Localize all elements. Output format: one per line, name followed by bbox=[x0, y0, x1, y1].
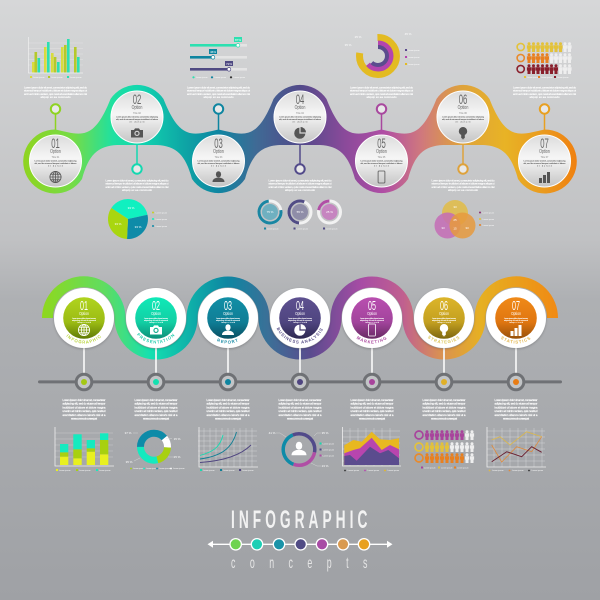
text block under node 06: adipiscing elit, sed do eiusmod tempor bbox=[422, 402, 466, 406]
text block above option 05 bbox=[350, 86, 413, 99]
text block below option 02: Lorem ipsum dolor sit amet, consectetur adipiscing elit, sed do bbox=[106, 178, 169, 182]
pie chart: Lorem ipsum bbox=[156, 219, 167, 221]
badge 04 business analysis: Option bbox=[295, 310, 305, 316]
badge 07 statistics bbox=[485, 288, 547, 350]
text block under node 05: ex ea commodo consequat bbox=[359, 416, 385, 420]
three ring gauges: Lorem ipsum bbox=[326, 228, 338, 230]
badge 03 report: Lorem ipsum dolor sit amet consec bbox=[216, 317, 240, 320]
top bar chart: Lorem ipsum bbox=[33, 77, 45, 79]
option 02 circle: Title 02 bbox=[133, 111, 141, 115]
text block under node 02: adipiscing elit, sed do eiusmod tempor bbox=[134, 402, 178, 406]
stacked bar chart bbox=[55, 427, 114, 472]
pictogram chart top: Lorem ipsum bbox=[527, 77, 539, 79]
progress bars chart bbox=[190, 37, 247, 79]
venn diagram: 15 bbox=[453, 226, 457, 230]
text block under node 07: incididunt ut labore et dolore magna bbox=[494, 405, 538, 409]
donut chart: Lorem ipsum bbox=[173, 468, 185, 470]
text block under node 01: exercitation ullamco laboris nisi ut a bbox=[62, 413, 106, 417]
text block under node 03: ex ea commodo consequat bbox=[215, 416, 241, 420]
line chart with curves: Lorem ipsum bbox=[223, 470, 235, 472]
option 07 circle: et dolore bbox=[537, 164, 553, 167]
badge 02 presentation bbox=[125, 288, 187, 350]
donut chart: Lorem ipsum bbox=[146, 468, 158, 470]
pie chart: 33 % bbox=[135, 225, 142, 229]
option 05 circle: Lorem ipsum dolor sit amet, consectetur adipiscing bbox=[360, 160, 403, 162]
text block below option 02: eiusmod tempor incididunt ut labore et dolore magna aliqua ut bbox=[106, 182, 169, 186]
option 04 circle: Option bbox=[295, 104, 306, 110]
radial bar chart: Lorem ipsum bbox=[408, 64, 420, 66]
text block under node 02: ex ea commodo consequat bbox=[143, 416, 169, 420]
pictogram chart bottom: Lorem ipsum bbox=[441, 467, 453, 469]
badge 03 report: adipiscing elit sed do eiusmod bbox=[216, 319, 240, 322]
badge 03 report: Option bbox=[223, 310, 233, 316]
option 02 circle: 02 bbox=[133, 93, 141, 108]
radial bar chart: Lorem ipsum bbox=[408, 50, 420, 52]
multi line chart: Lorem ipsum bbox=[512, 470, 524, 472]
option 03 circle: et dolore bbox=[211, 164, 227, 167]
badge 04 business analysis: Lorem ipsum dolor sit amet consec bbox=[288, 317, 312, 320]
text block under node 01: incididunt ut labore et dolore magna bbox=[62, 405, 106, 409]
person radial chart: 41 % bbox=[269, 431, 276, 435]
area chart: Lorem ipsum bbox=[368, 470, 379, 472]
badge 06 strategies: STRATEGIES bbox=[428, 336, 460, 344]
venn diagram bbox=[434, 200, 494, 238]
person radial chart: 35 % bbox=[322, 431, 329, 435]
option 04 circle: elit, sed do eiusmod tempor incididunt ut labore bbox=[279, 118, 322, 121]
text block below option 02 bbox=[106, 178, 169, 192]
pictogram chart bottom bbox=[415, 430, 474, 469]
progress bars chart: 46% bbox=[210, 50, 216, 54]
option 02 circle bbox=[111, 91, 163, 143]
text block under node 01: Lorem ipsum dolor sit amet, consectetur bbox=[62, 398, 106, 402]
text block under node 05: adipiscing elit, sed do eiusmod tempor bbox=[350, 402, 394, 406]
text block above option 07: enim ad minim veniam, quis nostrud exercitation ullamco nisi bbox=[513, 92, 576, 96]
option 05 circle: Title 05 bbox=[378, 155, 386, 159]
top bar chart: Lorem ipsum bbox=[70, 77, 82, 79]
badge 03 report: tempor incid bbox=[221, 321, 235, 324]
timeline node 01 bbox=[76, 374, 92, 390]
donut chart bbox=[125, 431, 185, 470]
text block below option 06 bbox=[432, 178, 495, 192]
option 07 circle: Option bbox=[539, 148, 550, 154]
option 04 circle: 04 bbox=[296, 93, 304, 108]
option 01 circle bbox=[30, 135, 82, 187]
text block below option 06: Lorem ipsum dolor sit amet, consectetur adipiscing elit, sed do bbox=[432, 178, 495, 182]
pictogram chart top: Lorem ipsum bbox=[541, 77, 553, 79]
pictogram chart top bbox=[517, 42, 572, 79]
badge 02 presentation: PRESENTATION bbox=[137, 332, 174, 344]
option 04 circle: Title 04 bbox=[296, 111, 304, 115]
text block under node 01: adipiscing elit, sed do eiusmod tempor bbox=[62, 402, 106, 406]
badge 02 presentation: Option bbox=[151, 310, 161, 316]
text block below option 04 bbox=[268, 178, 332, 192]
progress bars chart: Lorem ipsum bbox=[234, 77, 245, 79]
option 07 circle bbox=[518, 135, 570, 187]
option 05 circle: Option bbox=[376, 148, 387, 154]
area chart bbox=[342, 427, 401, 472]
text block under node 07: exercitation ullamco laboris nisi ut a bbox=[494, 413, 538, 417]
venn diagram: 25 bbox=[453, 218, 457, 222]
badge 01 infographic: 01 bbox=[80, 300, 88, 314]
option 04 circle: Lorem ipsum dolor sit amet, consectetur adipiscing bbox=[279, 116, 322, 118]
text block under node 03 bbox=[206, 398, 250, 420]
serpentine ribbon bbox=[48, 282, 552, 354]
badge 07 statistics: STATISTICS bbox=[500, 336, 530, 344]
option 07 circle: 07 bbox=[540, 137, 549, 152]
option 03 circle: Lorem ipsum dolor sit amet, consectetur adipiscing bbox=[198, 160, 240, 162]
progress bars chart: Lorem ipsum bbox=[214, 77, 226, 79]
text block under node 03: incididunt ut labore et dolore magna bbox=[206, 405, 250, 409]
pie chart: 33 % bbox=[128, 206, 135, 210]
timeline node 05 bbox=[364, 374, 380, 390]
text block under node 02: incididunt ut labore et dolore magna bbox=[134, 405, 178, 409]
pictogram chart bottom: Lorem ipsum bbox=[424, 467, 436, 469]
three ring gauges: 75 % bbox=[267, 210, 274, 214]
option 01 circle: Title 01 bbox=[52, 155, 60, 159]
text block above option 05: Lorem ipsum dolor sit amet, consectetur adipiscing elit, sed do bbox=[350, 86, 413, 90]
venn diagram: 33 bbox=[441, 226, 445, 230]
timeline node 06 bbox=[436, 374, 452, 390]
text block under node 04: ex ea commodo consequat bbox=[287, 416, 313, 420]
badge 06 strategies: Lorem ipsum dolor sit amet consec bbox=[432, 317, 456, 320]
donut chart: Lorem ipsum bbox=[133, 468, 145, 470]
badge 01 infographic: Option bbox=[79, 310, 89, 316]
three ring gauges: Lorem ipsum bbox=[267, 228, 279, 230]
line chart with curves: Lorem ipsum bbox=[242, 470, 254, 472]
text block under node 07: ut enim ad minim veniam, quis nostrud bbox=[494, 409, 538, 413]
badge 05 marketing: Option bbox=[367, 310, 377, 316]
progress bars chart: 87% bbox=[235, 38, 241, 42]
timeline bar bbox=[38, 380, 562, 383]
option 06 circle: Title 06 bbox=[459, 111, 467, 115]
badge 03 report bbox=[197, 288, 259, 350]
text block above option 07 bbox=[513, 86, 576, 99]
badge 01 infographic: tempor incid bbox=[77, 321, 91, 324]
multi line chart bbox=[487, 427, 546, 472]
venn diagram: 33 bbox=[465, 226, 469, 230]
timeline node 07 bbox=[508, 374, 524, 390]
text block above option 07: eiusmod tempor incididunt ut labore et dolore magna aliqua ut bbox=[513, 89, 576, 93]
option 03 circle: Option bbox=[213, 148, 224, 154]
three ring gauges: Lorem ipsum bbox=[296, 228, 308, 230]
line chart with curves: Lorem ipsum bbox=[203, 470, 215, 472]
text block below option 06: enim ad minim veniam, quis nostrud exercitation ullamco nisi bbox=[432, 185, 495, 189]
option 06 circle: 06 bbox=[459, 93, 467, 108]
option 02 circle: elit, sed do eiusmod tempor incididunt ut labore bbox=[116, 118, 159, 121]
badge 05 marketing: Lorem ipsum dolor sit amet consec bbox=[360, 317, 384, 320]
donut chart: Lorem ipsum bbox=[159, 468, 171, 470]
text block under node 03: exercitation ullamco laboris nisi ut a bbox=[206, 413, 250, 417]
option 03 circle bbox=[192, 135, 244, 187]
pictogram chart top: Lorem ipsum bbox=[557, 77, 569, 79]
multi line chart: Lorem ipsum bbox=[532, 470, 543, 472]
text block below option 02: aliquip ex ea commodo bbox=[122, 188, 152, 192]
text block under node 05: exercitation ullamco laboris nisi ut a bbox=[350, 413, 394, 417]
wave ribbon bbox=[23, 85, 577, 193]
stacked bar chart: Lorem ipsum bbox=[59, 470, 71, 472]
top bar chart bbox=[28, 37, 83, 79]
text block under node 06: exercitation ullamco laboris nisi ut a bbox=[422, 413, 466, 417]
text block under node 06 bbox=[422, 398, 466, 420]
text block under node 03: adipiscing elit, sed do eiusmod tempor bbox=[206, 402, 250, 406]
progress bars chart: 72% bbox=[226, 62, 232, 66]
person radial chart bbox=[269, 431, 334, 468]
progress bars chart: Lorem ipsum bbox=[196, 77, 208, 79]
text block above option 07: Lorem ipsum dolor sit amet, consectetur adipiscing elit, sed do bbox=[513, 86, 576, 90]
text block under node 04: ut enim ad minim veniam, quis nostrud bbox=[278, 409, 322, 413]
text block above option 05: enim ad minim veniam, quis nostrud exercitation ullamco nisi bbox=[350, 92, 413, 96]
donut chart: 15 % bbox=[174, 455, 181, 459]
badge 01 infographic bbox=[53, 288, 115, 350]
badge 02 presentation: adipiscing elit sed do eiusmod bbox=[144, 319, 168, 322]
text block above option 01: enim ad minim veniam, quis nostrud exercitation ullamco nisi bbox=[24, 92, 87, 96]
text block under node 06: Lorem ipsum dolor sit amet, consectetur bbox=[422, 398, 466, 402]
badge 04 business analysis: adipiscing elit sed do eiusmod bbox=[288, 319, 312, 322]
badge 02 presentation: tempor incid bbox=[149, 321, 163, 324]
text block under node 04 bbox=[278, 398, 322, 420]
pie chart: Lorem ipsum bbox=[156, 226, 167, 228]
text block under node 02: ut enim ad minim veniam, quis nostrud bbox=[134, 409, 178, 413]
text block under node 01: ut enim ad minim veniam, quis nostrud bbox=[62, 409, 106, 413]
text block below option 04: enim ad minim veniam, quis nostrud exercitation ullamco nisi bbox=[268, 185, 332, 189]
person radial chart: Lorem ipsum bbox=[322, 443, 334, 445]
option 06 circle bbox=[437, 91, 489, 143]
text block below option 06: aliquip ex ea commodo bbox=[448, 188, 478, 192]
option 02 circle: Option bbox=[132, 104, 143, 110]
text block under node 01 bbox=[62, 398, 106, 420]
badge 03 report: 03 bbox=[224, 300, 232, 314]
badge 04 business analysis: tempor incid bbox=[293, 321, 307, 324]
badge 02 presentation: Lorem ipsum dolor sit amet consec bbox=[144, 317, 168, 320]
text block above option 03: enim ad minim veniam, quis nostrud exercitation ullamco nisi bbox=[187, 92, 250, 96]
option 01 circle: Option bbox=[50, 148, 61, 154]
donut chart: 37 % bbox=[125, 431, 132, 435]
option 05 circle: 05 bbox=[377, 137, 386, 152]
text block under node 07: Lorem ipsum dolor sit amet, consectetur bbox=[494, 398, 538, 402]
option 06 circle: Lorem ipsum dolor sit amet, consectetur adipiscing bbox=[442, 116, 485, 118]
text block under node 04: Lorem ipsum dolor sit amet, consectetur bbox=[278, 398, 322, 402]
text block under node 02: exercitation ullamco laboris nisi ut a bbox=[134, 413, 178, 417]
option 03 circle: elit, sed do eiusmod tempor incididunt ut labore bbox=[198, 162, 240, 165]
donut chart: 35 % bbox=[126, 460, 133, 464]
text block above option 01: aliquip ex ea commodo bbox=[40, 95, 71, 99]
text block above option 03 bbox=[187, 86, 250, 99]
text block under node 05: ut enim ad minim veniam, quis nostrud bbox=[350, 409, 394, 413]
three ring gauges: 25 % bbox=[326, 210, 333, 214]
option 07 circle: Lorem ipsum dolor sit amet, consectetur adipiscing bbox=[524, 160, 566, 162]
text block under node 02: Lorem ipsum dolor sit amet, consectetur bbox=[134, 398, 178, 402]
text block above option 05: eiusmod tempor incididunt ut labore et dolore magna aliqua ut bbox=[350, 89, 413, 93]
top bar chart: Lorem ipsum bbox=[51, 77, 63, 79]
option 05 circle: et dolore bbox=[374, 164, 390, 167]
text block under node 02 bbox=[134, 398, 178, 420]
badge 05 marketing: tempor incid bbox=[365, 321, 379, 324]
stems from circles to timeline bbox=[84, 345, 516, 376]
badge 01 infographic: adipiscing elit sed do eiusmod bbox=[72, 319, 96, 322]
text block above option 03: Lorem ipsum dolor sit amet, consectetur adipiscing elit, sed do bbox=[187, 86, 250, 90]
venn diagram: Lorem ipsum bbox=[482, 219, 494, 221]
option 03 circle: 03 bbox=[214, 137, 223, 152]
option 06 circle: Option bbox=[458, 104, 469, 110]
option 01 circle: elit, sed do eiusmod tempor incididunt ut labore bbox=[34, 162, 77, 165]
person radial chart: Lorem ipsum bbox=[322, 449, 334, 451]
badge 07 statistics: Lorem ipsum dolor sit amet consec bbox=[504, 317, 528, 320]
option 04 circle bbox=[274, 91, 326, 143]
text block above option 01: eiusmod tempor incididunt ut labore et dolore magna aliqua ut bbox=[24, 89, 87, 93]
text block under node 06: ut enim ad minim veniam, quis nostrud bbox=[422, 409, 466, 413]
option 07 circle: elit, sed do eiusmod tempor incididunt ut labore bbox=[524, 162, 566, 165]
text block under node 04: incididunt ut labore et dolore magna bbox=[278, 405, 322, 409]
text block above option 05: aliquip ex ea commodo bbox=[366, 95, 397, 99]
badge 05 marketing: adipiscing elit sed do eiusmod bbox=[360, 319, 384, 322]
text block below option 06: eiusmod tempor incididunt ut labore et dolore magna aliqua ut bbox=[432, 182, 495, 186]
badge 02 presentation: 02 bbox=[152, 300, 160, 314]
text block above option 03: aliquip ex ea commodo bbox=[204, 95, 234, 99]
venn diagram: Lorem ipsum bbox=[482, 225, 494, 227]
text block under node 05: Lorem ipsum dolor sit amet, consectetur bbox=[350, 398, 394, 402]
line chart with curves bbox=[198, 427, 258, 472]
badge 06 strategies: tempor incid bbox=[437, 321, 451, 324]
badge 01 infographic: INFOGRAPHIC bbox=[66, 334, 101, 344]
text block under node 05 bbox=[350, 398, 394, 420]
badge 07 statistics: Option bbox=[511, 310, 521, 316]
option 01 circle: Lorem ipsum dolor sit amet, consectetur adipiscing bbox=[34, 160, 77, 162]
option 04 circle: et dolore bbox=[292, 120, 308, 123]
three ring gauges bbox=[257, 199, 342, 230]
area chart: Lorem ipsum bbox=[348, 470, 359, 472]
badge 07 statistics: tempor incid bbox=[509, 321, 523, 324]
radial bar chart bbox=[345, 32, 420, 74]
pie chart: 33 % bbox=[115, 222, 122, 226]
title arrow with coloured dots bbox=[208, 539, 392, 550]
badge 03 report: REPORT bbox=[217, 338, 238, 344]
timeline node 04 bbox=[292, 374, 308, 390]
option 02 circle: Lorem ipsum dolor sit amet, consectetur adipiscing bbox=[116, 116, 159, 118]
badge 06 strategies: adipiscing elit sed do eiusmod bbox=[432, 319, 456, 322]
text block above option 01: Lorem ipsum dolor sit amet, consectetur adipiscing elit, sed do bbox=[24, 86, 87, 90]
text block above option 01 bbox=[24, 86, 87, 99]
multi line chart: Lorem ipsum bbox=[492, 470, 504, 472]
timeline node 02 bbox=[148, 374, 164, 390]
badge 06 strategies: Option bbox=[439, 310, 449, 316]
area chart: Lorem ipsum bbox=[388, 470, 399, 472]
donut chart: 15 % bbox=[174, 437, 181, 441]
venn diagram: 33 bbox=[453, 205, 457, 209]
venn diagram: Lorem ipsum bbox=[482, 212, 494, 214]
person radial chart: Lorem ipsum bbox=[322, 455, 334, 457]
text block under node 07 bbox=[494, 398, 538, 420]
radial bar chart: 25 % bbox=[355, 35, 362, 39]
badge 04 business analysis: BUSINESS ANALYSIS bbox=[276, 327, 323, 344]
badge 06 strategies: 06 bbox=[440, 300, 448, 314]
badge 05 marketing bbox=[341, 288, 403, 350]
text block under node 06: incididunt ut labore et dolore magna bbox=[422, 405, 466, 409]
pie chart bbox=[108, 199, 167, 239]
badge 04 business analysis: 04 bbox=[296, 300, 304, 314]
text block under node 03: Lorem ipsum dolor sit amet, consectetur bbox=[206, 398, 250, 402]
text block under node 04: exercitation ullamco laboris nisi ut a bbox=[278, 413, 322, 417]
pie chart: Lorem ipsum bbox=[156, 212, 167, 214]
badge 05 marketing: MARKETING bbox=[356, 336, 386, 344]
timeline node 03 bbox=[220, 374, 236, 390]
text block under node 07: adipiscing elit, sed do eiusmod tempor bbox=[494, 402, 538, 406]
badge 05 marketing: 05 bbox=[368, 300, 376, 314]
pictogram chart bottom: Lorem ipsum bbox=[457, 467, 469, 469]
main title: INFOGRAPHIC bbox=[231, 507, 367, 534]
person radial chart: 23 % bbox=[322, 464, 329, 468]
option 01 circle: 01 bbox=[51, 137, 60, 152]
stacked bar chart: Lorem ipsum bbox=[79, 470, 91, 472]
option 01 circle: et dolore bbox=[48, 164, 64, 167]
text block below option 02: enim ad minim veniam, quis nostrud exercitation ullamco nisi bbox=[106, 185, 169, 189]
stacked bar chart: Lorem ipsum bbox=[99, 470, 111, 472]
option 05 circle: elit, sed do eiusmod tempor incididunt ut labore bbox=[360, 162, 403, 165]
badge 04 business analysis bbox=[269, 288, 331, 350]
option 03 circle: Title 03 bbox=[215, 155, 223, 159]
text block under node 03: ut enim ad minim veniam, quis nostrud bbox=[206, 409, 250, 413]
text block under node 04: adipiscing elit, sed do eiusmod tempor bbox=[278, 402, 322, 406]
option 07 circle: Title 07 bbox=[541, 155, 549, 159]
text block above option 03: eiusmod tempor incididunt ut labore et dolore magna aliqua ut bbox=[187, 89, 250, 93]
three ring gauges: 55 % bbox=[297, 210, 304, 214]
badge 06 strategies bbox=[413, 288, 475, 350]
option 05 circle bbox=[356, 135, 408, 187]
concepts subtitle: concepts bbox=[231, 553, 367, 572]
text block under node 05: incididunt ut labore et dolore magna bbox=[350, 405, 394, 409]
radial bar chart: Lorem ipsum bbox=[408, 57, 420, 59]
text block below option 04: Lorem ipsum dolor sit amet, consectetur adipiscing elit, sed do bbox=[268, 178, 332, 182]
text block under node 01: ex ea commodo consequat bbox=[71, 416, 97, 420]
text block above option 07: aliquip ex ea commodo bbox=[530, 95, 560, 99]
option 02 circle: et dolore bbox=[130, 120, 145, 123]
badge 07 statistics: adipiscing elit sed do eiusmod bbox=[504, 319, 528, 322]
option 06 circle: et dolore bbox=[456, 120, 471, 123]
badge 07 statistics: 07 bbox=[512, 300, 520, 314]
radial bar chart: 35 % bbox=[345, 43, 352, 47]
option 06 circle: elit, sed do eiusmod tempor incididunt ut labore bbox=[442, 118, 485, 121]
badge 01 infographic: Lorem ipsum dolor sit amet consec bbox=[72, 317, 96, 320]
connector pins of the wave bbox=[51, 104, 549, 174]
text block under node 07: ex ea commodo consequat bbox=[503, 416, 529, 420]
text block under node 06: ex ea commodo consequat bbox=[431, 416, 457, 420]
text block below option 04: aliquip ex ea commodo bbox=[285, 188, 315, 192]
radial bar chart: 45 % bbox=[405, 32, 412, 36]
text block below option 04: eiusmod tempor incididunt ut labore et dolore magna aliqua ut bbox=[268, 182, 332, 186]
